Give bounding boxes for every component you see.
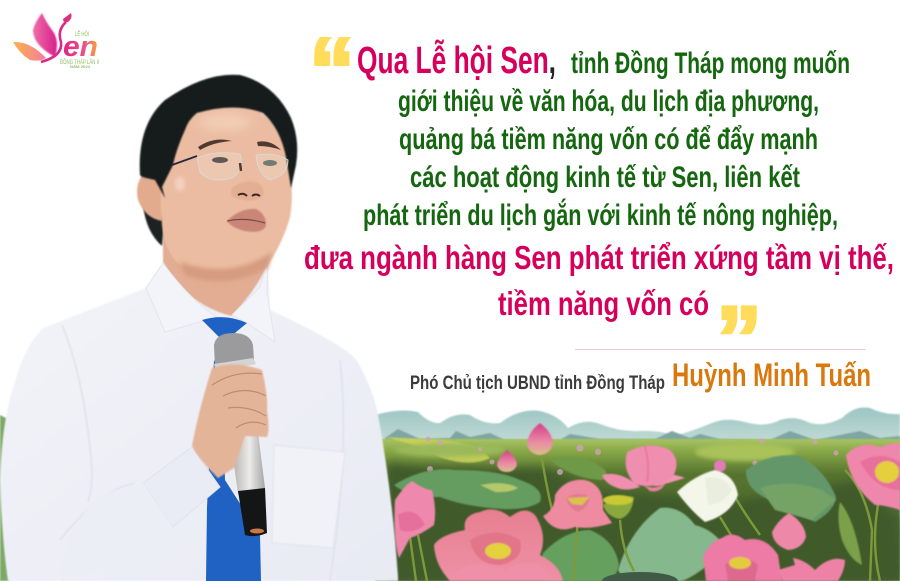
lotus pink upper centre <box>602 445 685 491</box>
nose <box>231 181 264 201</box>
lotus pink right <box>846 443 900 510</box>
nose bridge <box>240 163 241 171</box>
logo le hoi: LỄ HỘI <box>75 31 89 38</box>
leaf: dark bottom <box>602 572 678 581</box>
far foliage patch left <box>395 443 505 457</box>
quote text <box>304 38 894 322</box>
logo <box>13 13 99 69</box>
shirt body <box>0 262 398 581</box>
neck <box>163 225 268 316</box>
collar left <box>146 263 217 332</box>
lotus big salmon <box>434 509 563 581</box>
back hair <box>143 200 166 246</box>
glasses <box>197 153 288 180</box>
leaf: far right <box>760 483 836 520</box>
dark foliage <box>386 462 900 581</box>
sleeve cuff <box>143 447 220 527</box>
lotus bottom right <box>778 558 845 581</box>
right eye <box>263 160 277 166</box>
far foliage patch <box>695 443 795 461</box>
distant hills <box>385 429 900 446</box>
ear <box>137 175 165 221</box>
leaf: right <box>746 455 836 522</box>
left eyebrow <box>198 139 232 150</box>
lotus white <box>677 470 738 522</box>
logo bud <box>63 13 72 22</box>
yellow-green bank <box>384 437 490 463</box>
leaf: round <box>542 530 619 581</box>
tie <box>202 317 261 581</box>
logo dong thap: ĐỒNG THÁP LẦN II <box>60 56 99 66</box>
stems <box>409 452 880 581</box>
lotus bud top <box>527 423 553 455</box>
fingers <box>212 373 266 428</box>
field <box>375 439 900 581</box>
leaf: striped <box>548 456 607 480</box>
leaf: big left <box>394 469 541 509</box>
attribution divider <box>575 349 866 350</box>
face <box>161 103 292 277</box>
lotus bottom centre <box>703 534 782 581</box>
portrait <box>0 75 398 581</box>
logo petal orange <box>13 42 46 61</box>
logo petal pink <box>33 13 57 57</box>
leaf: striped right <box>838 502 862 565</box>
distant blossoms <box>426 436 838 475</box>
lotus pink left <box>394 481 435 558</box>
leaf highlight <box>480 483 518 492</box>
cheek highlight <box>175 177 185 191</box>
left eye <box>212 157 228 163</box>
mic head <box>214 333 254 368</box>
mouth line <box>227 219 265 223</box>
quote mark closing: ” <box>716 288 762 390</box>
seed pod <box>603 495 634 519</box>
mic ring <box>214 358 256 372</box>
lotus bud purple <box>714 460 726 472</box>
hand <box>192 364 268 478</box>
hair <box>140 75 297 198</box>
quote mark opening: “ <box>309 20 355 122</box>
logo year: NĂM 2024 <box>70 64 90 69</box>
glasses temple <box>172 156 197 165</box>
forehead highlight <box>199 113 251 131</box>
nostrils <box>238 194 260 196</box>
mountains <box>375 407 900 445</box>
mic grip <box>238 488 267 536</box>
logo swoosh <box>41 22 66 62</box>
forearm sleeve <box>60 483 173 581</box>
mic end <box>250 528 264 534</box>
lotus bud right <box>772 513 806 550</box>
collar right <box>232 260 275 342</box>
lotus field illustration <box>0 407 900 581</box>
quote line 1: Qua Lễ hội Sen, <box>357 38 556 82</box>
mouth <box>227 209 266 232</box>
right eyebrow <box>257 141 281 150</box>
shirt pocket <box>272 445 345 548</box>
lotus mid pink <box>543 480 612 529</box>
logo en: en <box>63 31 98 63</box>
chin shadow <box>180 252 272 281</box>
shirt folds <box>60 325 343 581</box>
microphone <box>214 333 267 536</box>
lotus bud small <box>497 450 517 472</box>
left field sliver <box>0 415 10 581</box>
attribution <box>410 357 871 394</box>
quote line 7: tiềm năng vốn có <box>498 285 709 322</box>
mic body <box>234 432 265 494</box>
leaf: pale <box>618 508 727 581</box>
speaker role: Phó Chủ tịch UBND tỉnh Đồng Tháp <box>410 373 665 394</box>
